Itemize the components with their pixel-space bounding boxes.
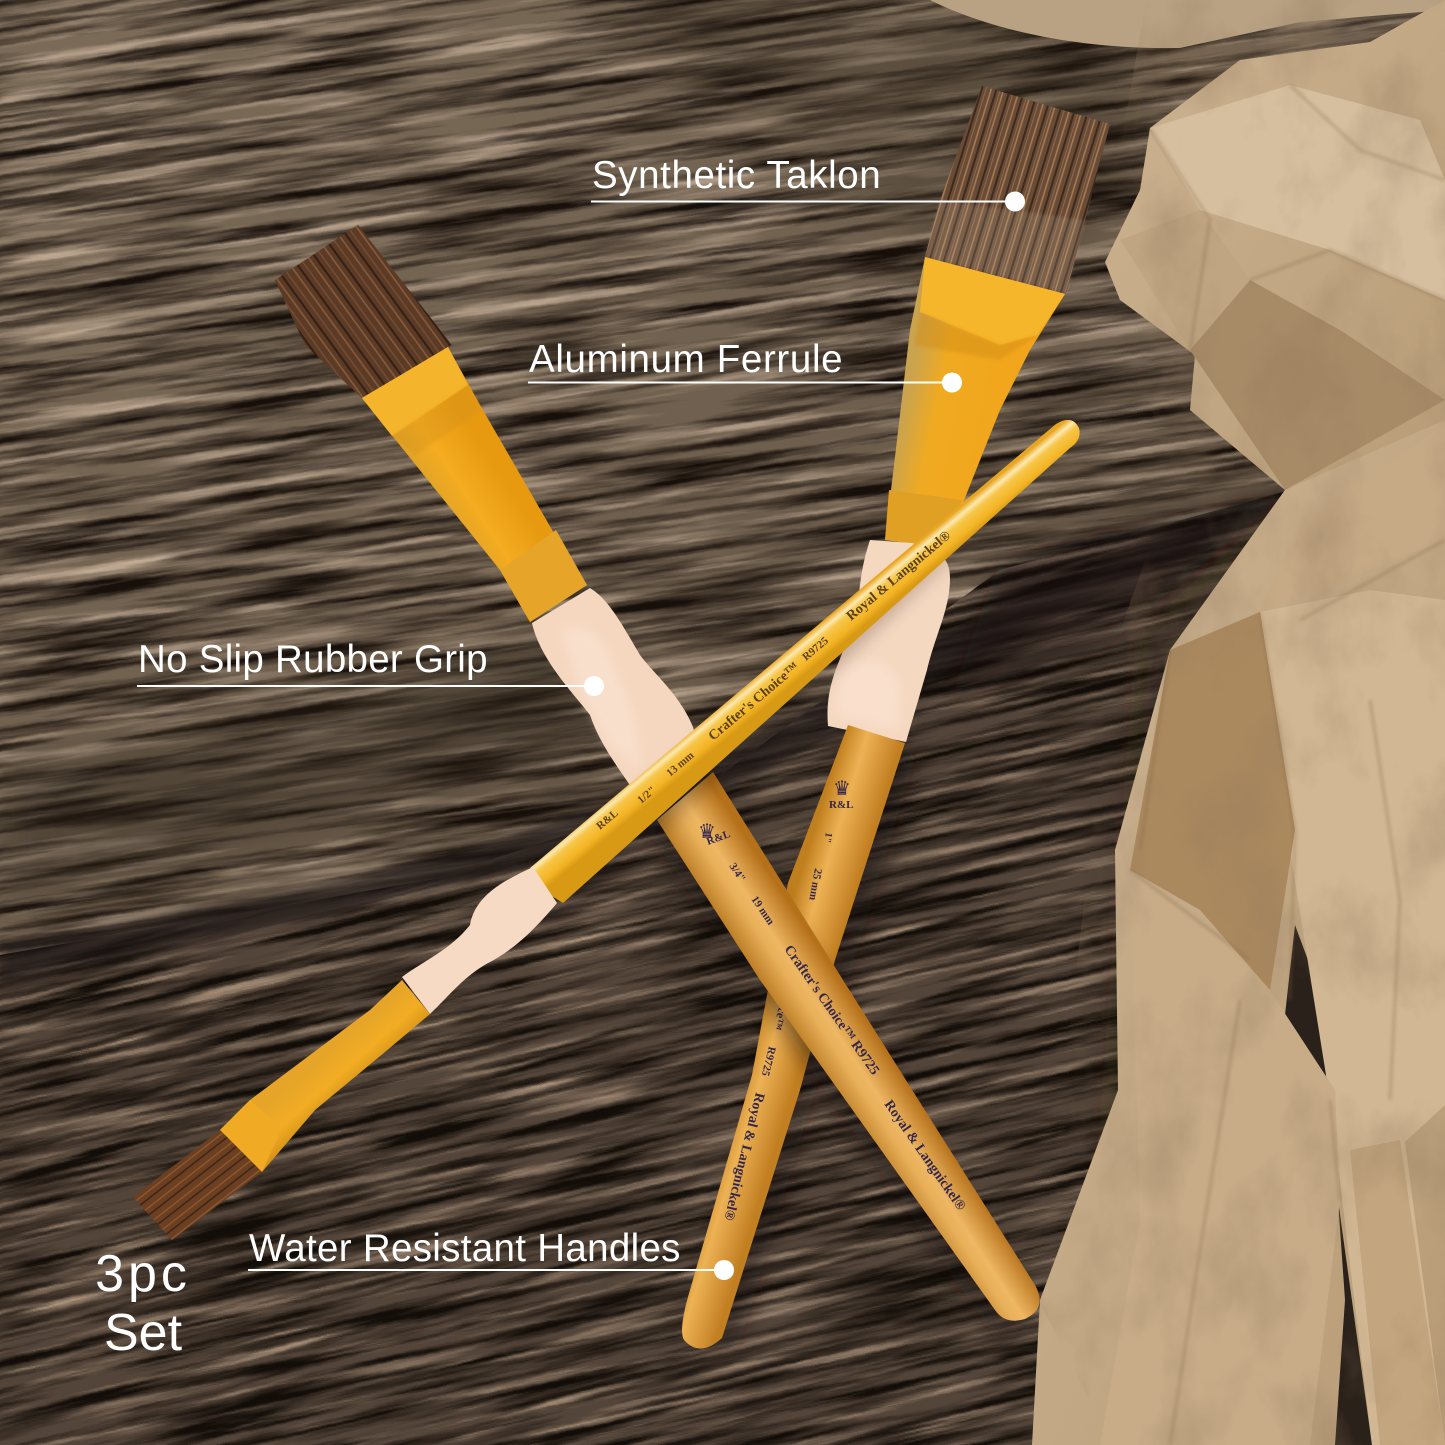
label: brush 3 imprint: Crafter's Choice™ [706,660,802,744]
label: brush 3 imprint: Royal & Langnickel® [844,528,954,624]
label: brush 1 imprint: 19 mm [749,894,776,927]
brush 2: right upright brush [682,86,1110,1351]
set size label: 3pc [95,1245,191,1303]
callout: Aluminum Ferrule: Aluminum Ferrule [529,338,843,381]
label: brush 2 imprint: 25 mm [806,867,824,901]
callout: Synthetic Taklon: Synthetic Taklon [592,154,881,197]
label: brush 3 imprint [594,528,954,832]
label: brush 2 imprint [720,776,853,1222]
handle [657,772,1040,1321]
ferrule [220,980,430,1172]
set size label [95,1245,191,1362]
bristles [925,86,1110,294]
ferrule [362,347,587,622]
bristles [275,225,452,398]
grip [828,540,950,742]
callout: Synthetic Taklon [591,154,1025,212]
label: brush 3 imprint: R9725 [800,635,831,663]
grip [402,867,557,1014]
dark gaps between paper folds [1285,925,1345,1105]
label: brush 1 imprint: 3/4" [727,861,748,884]
crumpled kraft paper [930,0,1445,1445]
label: brush 1 imprint: ♛ [698,819,716,843]
label: brush 1 imprint: Crafter's Choice™ R9725 [781,943,882,1078]
label: brush 2 imprint: R&L [829,799,853,811]
callout: No Slip Rubber Grip [137,638,604,696]
handle [530,420,1080,903]
brush 1: large diagonal brush [275,225,1040,1334]
label: brush 2 imprint: Royal & Langnickel® [720,1091,767,1222]
set size label: Set [104,1304,183,1362]
brush 3: thin crossing brush [133,420,1080,1240]
label: brush 1 imprint [698,819,968,1214]
label: brush 3 imprint: 13 mm [664,749,697,779]
grip [532,588,705,800]
label: brush 2 imprint: oice™ [770,997,792,1032]
label: brush 2 imprint: R9725 [759,1045,778,1078]
label: brush 3 imprint: 1/2" [635,784,658,806]
label: brush 2 imprint: ♛ [833,776,851,800]
label: brush 3 imprint: R&L [594,807,621,832]
label: brush 1 imprint: Royal & Langnickel® [881,1098,968,1214]
callout: No Slip Rubber Grip: No Slip Rubber Grip [138,638,488,681]
ferrule [885,257,1065,548]
callout: Water Resistant Handles: Water Resistant Handles [249,1227,681,1270]
label: brush 2 imprint: 1" [821,831,834,844]
callout: Aluminum Ferrule [528,338,962,392]
handle [682,725,905,1349]
bristles [133,1130,262,1240]
label: brush 1 imprint: R&L [705,828,732,848]
